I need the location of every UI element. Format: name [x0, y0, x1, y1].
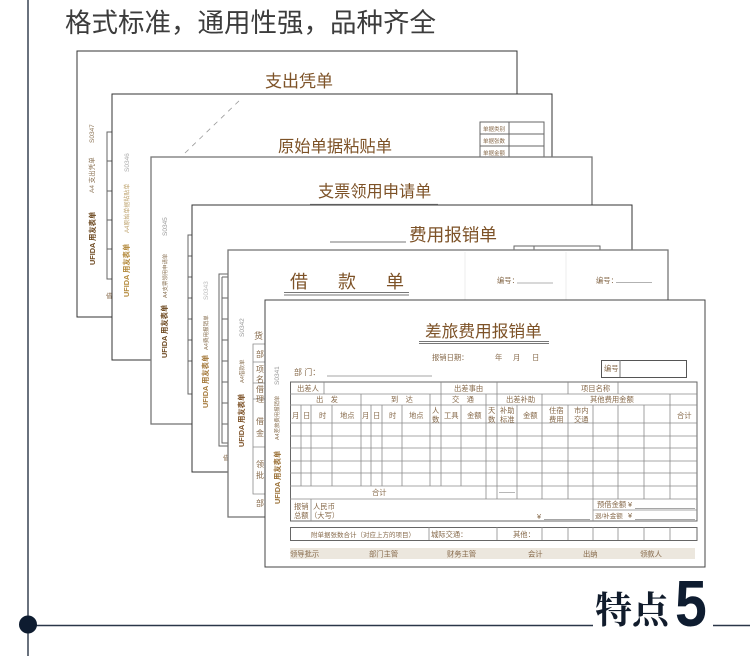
expense table: 交通: [574, 415, 589, 424]
voucher info box: 单据类别: [483, 125, 505, 133]
expense table: 日: [373, 411, 380, 420]
expense table: 市内: [574, 406, 589, 415]
expense table: （大写）: [310, 511, 339, 520]
expense table: 时: [319, 411, 327, 420]
partly hidden form rows: 部: [256, 498, 264, 508]
expense table: ¥: [628, 500, 633, 509]
feature label: 特点 5: 5: [675, 568, 707, 640]
expense table: ¥: [537, 512, 542, 521]
signature strip: 领款人: [640, 550, 663, 558]
form sheet: 费用报销单: UFIDA 用友表单: [201, 355, 210, 408]
expense table: 项目名称: [581, 384, 610, 393]
voucher info box: [480, 122, 544, 157]
signature strip: [290, 548, 695, 559]
form sheet: 借款单: S0342: [239, 318, 246, 337]
form sheet: 借款单: UFIDA 用友表单: [237, 394, 246, 447]
form sheet: 支出凭单: 支出凭单: [265, 72, 333, 91]
expense table: 月: [292, 411, 299, 420]
form sheet: 费用报销单: A4费用报销单: [202, 315, 210, 350]
expense table: 出差补助: [506, 395, 535, 404]
partly hidden form rows: 金: [256, 428, 264, 438]
form sheet: 费用报销单: S0343: [203, 281, 210, 300]
form sheet: 费用报销单: 借: [223, 453, 230, 462]
form sheet: 支票领用申请单: A4支票领用申请单: [161, 253, 169, 298]
form sheet: 借款单: 编号：: [497, 276, 519, 285]
partly hidden form rows: 借: [256, 384, 264, 394]
stacked form sheets: [77, 51, 705, 567]
expense table: 天: [488, 406, 496, 415]
expense table: 工具: [444, 411, 459, 420]
form sheet: 原始单据粘贴单: 原始单据粘贴单: [278, 138, 392, 156]
expense table: 其他费用金额: [590, 395, 634, 404]
form sheet: 支出凭单: UFIDA 用友表单: [88, 212, 97, 265]
expense table: 金额: [467, 411, 482, 420]
feature label: 特点 5: [595, 568, 707, 640]
attachment row: 附单据张数合计（对应上方的项目）: [311, 530, 415, 539]
number box: [602, 360, 686, 378]
form sheet: 支出凭单: [77, 51, 517, 317]
spine text: [273, 366, 282, 504]
expense table: 出差事由: [454, 384, 483, 393]
expense table: [290, 382, 697, 521]
partly hidden form rows: 项: [256, 365, 264, 374]
partly hidden form rows: 部: [256, 349, 264, 359]
expense table: 到 达: [391, 395, 414, 404]
expense table: 报销: [294, 502, 309, 511]
date and department: [294, 353, 539, 377]
title: 格式标准，通用性强，品种齐全: [65, 8, 436, 38]
expense table: 出差人: [297, 384, 320, 393]
form sheet: 支出凭单: S0347: [89, 124, 96, 143]
spine text: UFIDA 用友表单: [273, 451, 282, 504]
date and department: 年: [495, 353, 502, 362]
signature strip: 领导批示: [290, 550, 319, 558]
form sheet: 借款单: 编号：: [596, 276, 618, 285]
form sheet: 借款单: [228, 250, 668, 517]
date and department: 日: [532, 353, 539, 362]
expense table: 人: [432, 406, 440, 415]
date and department: 部 门：: [294, 367, 320, 377]
expense table: 数: [488, 415, 496, 424]
date and department: 月: [513, 353, 520, 362]
expense table: 出 发: [316, 395, 339, 404]
form sheet: 费用报销单: 费用报销单: [409, 225, 497, 245]
expense table: 人民币: [313, 502, 335, 511]
form sheet: 支出凭单: A4 支出凭单: [87, 157, 96, 193]
form sheet: 支票领用申请单: UFIDA 用友表单: [160, 305, 169, 358]
voucher info box: 单据张数: [483, 137, 506, 145]
form sheet: 支出凭单: 借: [106, 291, 113, 300]
form sheet: 支票领用申请单: [151, 157, 592, 424]
form sheet: 支票领用申请单: S0345: [162, 217, 169, 236]
form sheet: 差旅费用报销单: [265, 300, 705, 567]
expense table: ¥: [628, 511, 633, 520]
attachment row: 城际交通：: [431, 530, 467, 539]
signature strip: 会计: [528, 550, 543, 558]
expense table: 月: [362, 411, 369, 420]
expense table: 住宿: [549, 406, 564, 415]
expense table: 合计: [372, 488, 387, 497]
spine text: S0341: [274, 366, 281, 385]
feature label: 特点 5: 特点: [595, 590, 672, 632]
form sheet: 借款单: 借款单: [290, 272, 434, 292]
form sheet: 原始单据粘贴单: S0346: [124, 153, 131, 172]
expense table: 标准: [500, 415, 515, 424]
signature strip: 出纳: [583, 550, 598, 558]
partly hidden form rows: [253, 330, 265, 508]
form sheet: 原始单据粘贴单: A4原始单据粘贴单: [123, 184, 131, 233]
expense table: 数: [432, 415, 440, 424]
expense table: 退/补金额: [595, 511, 623, 520]
expense table: 日: [303, 411, 310, 420]
partly hidden form rows: 名: [256, 374, 264, 384]
form sheet: 原始单据粘贴单: [112, 94, 552, 360]
spine text: A4差旅费用报销单: [273, 395, 281, 440]
form sheet: 原始单据粘贴单: UFIDA 用友表单: [122, 244, 131, 297]
signature strip: 部门主管: [369, 550, 398, 558]
attachment row: [290, 527, 697, 540]
form title: 差旅费用报销单: [425, 322, 542, 341]
expense table: 费用: [549, 415, 564, 424]
attachment row: 其他：: [513, 530, 535, 539]
partly hidden form rows: 货: [254, 330, 263, 341]
expense table: 合计: [677, 411, 692, 420]
partly hidden form rows: 领: [256, 459, 264, 469]
partly hidden form rows: 借: [256, 416, 264, 426]
form sheet: 支票领用申请单: 支票领用申请单: [318, 183, 431, 201]
expense table: 时: [389, 411, 397, 420]
partly hidden form rows: 理: [256, 395, 264, 404]
date and department: 报销日期：: [432, 353, 468, 362]
expense table: 预借金额: [597, 500, 627, 509]
form sheet: 费用报销单: [192, 205, 632, 472]
expense table: 地点: [340, 411, 355, 420]
expense table: 总额: [294, 511, 309, 520]
expense table: 金额: [523, 411, 538, 420]
expense table: 补助: [500, 406, 515, 415]
voucher info box: 单据金额: [483, 149, 506, 157]
expense table: 交 通: [452, 395, 475, 404]
signature strip: 财务主管: [447, 550, 476, 558]
number box: 编号: [604, 364, 619, 373]
partly hidden form rows: 批: [256, 470, 264, 480]
form sheet: 借款单: A4借款单: [238, 359, 246, 383]
expense table: 地点: [409, 411, 424, 420]
